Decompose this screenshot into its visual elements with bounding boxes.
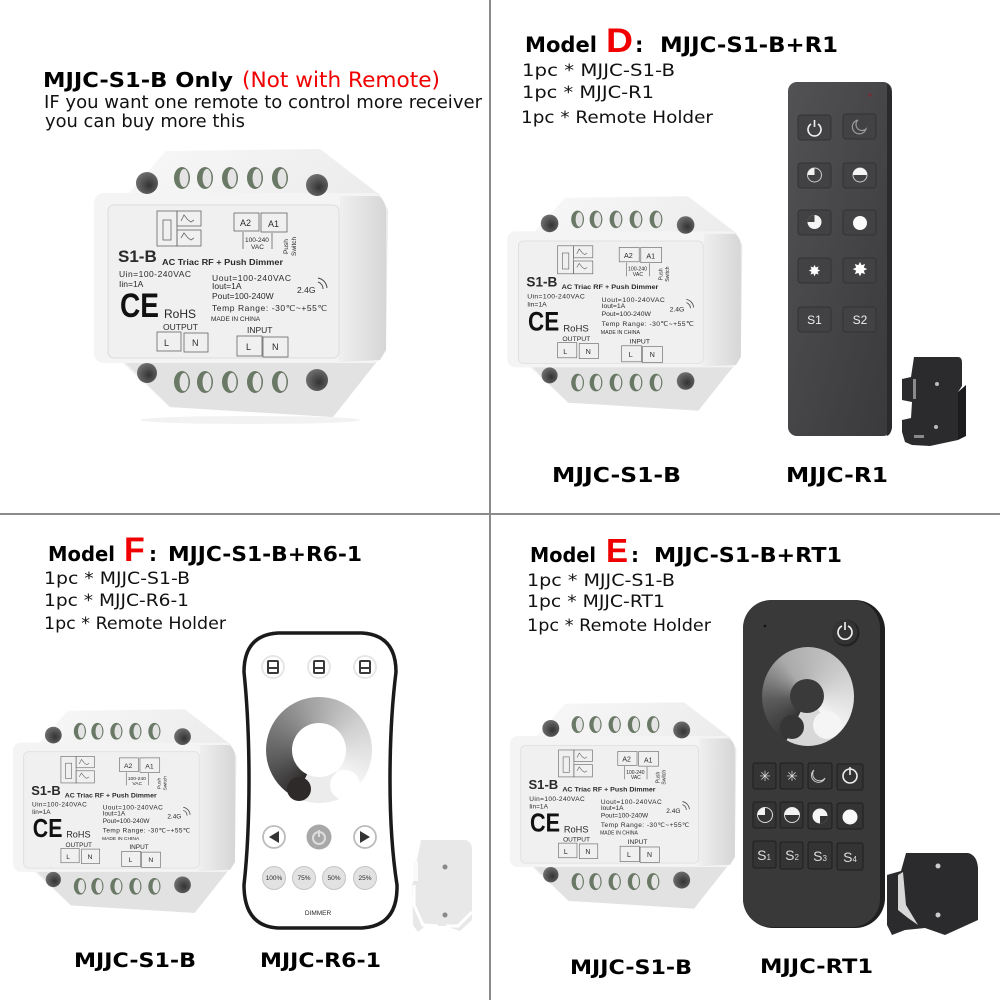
- device: S1-B dimmer large: VAC: [251, 244, 264, 251]
- device: S1-B dimmer: Temp Range: -30℃~+55℃: [103, 827, 190, 834]
- device: S1-B dimmer: Uout=100-240VAC: [602, 297, 665, 304]
- remote: MJJC-RT1: S4: [843, 849, 857, 865]
- device: S1-B dimmer: AC Triac RF + Push Dimmer: [562, 284, 659, 291]
- heading: Model F: [48, 531, 362, 569]
- device: S1-B dimmer: RoHS: [66, 830, 91, 840]
- device: S1-B dimmer: Switch: [163, 776, 169, 791]
- device: S1-B dimmer: S1-B: [526, 275, 558, 290]
- remote: MJJC-R1: [788, 82, 892, 436]
- contents list: 1pc * MJJC-S1-B: [522, 61, 675, 81]
- heading: Model E: MJJC-S1-B+RT1: [654, 543, 842, 567]
- remote: MJJC-RT1: S3: [813, 848, 827, 864]
- heading note: not with remote: (Not with Remote): [242, 68, 440, 92]
- panel: Model F: [13, 531, 472, 972]
- device: S1-B dimmer: AC Triac RF + Push Dimmer: [562, 787, 656, 794]
- panel: Model D: [507, 22, 966, 487]
- contents list: [521, 61, 713, 128]
- device: S1-B dimmer: A2: [622, 757, 631, 764]
- device: S1-B dimmer: N: [650, 350, 655, 359]
- device: S1-B dimmer: Iin=1A: [32, 809, 51, 816]
- device: S1-B dimmer: OUTPUT: [65, 842, 92, 849]
- remote: MJJC-RT1: ✳: [786, 769, 798, 785]
- device: S1-B dimmer large: N: [192, 338, 198, 348]
- device: S1-B dimmer: L: [129, 857, 133, 864]
- device: S1-B dimmer: VAC: [132, 781, 143, 787]
- device: S1-B dimmer large: A1: [268, 219, 279, 229]
- remote: MJJC-RT1: [743, 600, 885, 928]
- device: S1-B dimmer: Uin=100-240VAC: [527, 294, 585, 301]
- remote holder: black: [902, 357, 966, 446]
- device: S1-B dimmer large: CE: [120, 287, 159, 325]
- remote: MJJC-RT1: S1: [757, 847, 771, 863]
- label: MJJC-RT1: MJJC-RT1: [760, 955, 873, 978]
- device: S1-B dimmer large: Uin=100-240VAC: [119, 269, 191, 279]
- device: S1-B dimmer: Iout=1A: [602, 303, 626, 310]
- device: S1-B dimmer large: N: [272, 342, 278, 352]
- device: S1-B dimmer large: 2.4G: [297, 285, 315, 295]
- device: S1-B dimmer: MADE IN CHINA: [600, 831, 639, 837]
- remote: MJJC-R6-1: 50%: [327, 875, 341, 882]
- heading: Model E: Model: [530, 543, 596, 567]
- heading: Model D: [525, 22, 838, 60]
- device: S1-B dimmer: Uin=100-240VAC: [32, 802, 87, 809]
- device: S1-B dimmer large: L: [164, 338, 169, 348]
- device: S1-B dimmer: N: [585, 849, 590, 856]
- device: S1-B dimmer: VAC: [633, 272, 643, 278]
- device: S1-B dimmer: CE: [33, 815, 62, 843]
- device: S1-B dimmer: Temp Range: -30℃~+55℃: [601, 822, 690, 829]
- device: S1-B dimmer: 2.4G: [670, 306, 684, 313]
- device: S1-B dimmer: 2.4G: [167, 814, 181, 821]
- heading: Model E: :: [631, 543, 639, 567]
- device: S1-B dimmer: Pout=100-240W: [602, 311, 651, 318]
- contents list: 1pc * Remote Holder: [527, 616, 711, 635]
- device: S1-B dimmer: Temp Range: -30℃~+55℃: [602, 321, 694, 328]
- device: S1-B dimmer large: S1-B: [118, 247, 157, 266]
- device: S1-B dimmer large: 100-240: [245, 237, 269, 244]
- device: S1-B dimmer: L: [66, 854, 70, 861]
- device: S1-B dimmer: 100-240: [128, 776, 146, 782]
- device: S1-B dimmer: Pout=100-240W: [601, 813, 649, 820]
- device: S1-B dimmer: L: [563, 347, 567, 356]
- device: S1-B dimmer large: Switch: [291, 236, 298, 256]
- device: S1-B dimmer: 100-240: [628, 267, 647, 273]
- device: S1-B dimmer: A1: [646, 252, 655, 261]
- device: S1-B dimmer large: Iin=1A: [119, 279, 144, 289]
- device: S1-B dimmer: Iin=1A: [529, 803, 549, 810]
- remote: MJJC-R6-1: 75%: [297, 875, 311, 882]
- device: S1-B dimmer: [510, 702, 736, 909]
- device: S1-B dimmer: AC Triac RF + Push Dimmer: [65, 792, 157, 799]
- device: S1-B dimmer: RoHS: [564, 824, 589, 834]
- device: S1-B dimmer: CE: [530, 808, 560, 838]
- device: S1-B dimmer large: Temp Range: -30℃~+55℃: [212, 303, 327, 313]
- remote holder: black: [887, 853, 978, 935]
- remote: MJJC-R6-1: 100%: [266, 875, 283, 882]
- device: S1-B dimmer: S1-B: [528, 777, 558, 792]
- device: S1-B dimmer: Uin=100-240VAC: [529, 796, 585, 803]
- remote: MJJC-R6-1: 25%: [358, 875, 372, 882]
- device: S1-B dimmer: L: [627, 852, 631, 859]
- device: S1-B dimmer: N: [647, 852, 652, 859]
- remote holder: white: [412, 840, 472, 932]
- contents list: [527, 571, 711, 635]
- contents list: 1pc * Remote Holder: [521, 108, 713, 128]
- contents list: 1pc * MJJC-R6-1: [44, 591, 189, 610]
- description text: [44, 93, 483, 132]
- remote: MJJC-R1: ✸: [852, 259, 868, 281]
- contents list: 1pc * MJJC-R1: [522, 83, 654, 103]
- remote: MJJC-R6-1: DIMMER: [305, 910, 331, 917]
- heading: Model F: :: [149, 542, 157, 566]
- device: S1-B dimmer: 2.4G: [666, 808, 680, 815]
- remote: MJJC-RT1: S2: [785, 847, 799, 863]
- device: S1-B dimmer: L: [564, 849, 568, 856]
- label: MJJC-R1: MJJC-R1: [786, 463, 888, 487]
- device: S1-B dimmer large: MADE IN CHINA: [211, 316, 261, 323]
- device: S1-B dimmer: MADE IN CHINA: [601, 330, 641, 336]
- remote: MJJC-R6-1: [244, 633, 397, 928]
- device: S1-B dimmer large: AC Triac RF + Push Dimmer: [162, 258, 283, 267]
- device: S1-B dimmer: Switch: [662, 770, 668, 785]
- device: S1-B dimmer: S1-B: [31, 783, 61, 798]
- device: S1-B dimmer: OUTPUT: [563, 837, 590, 844]
- device: S1-B dimmer large: Iout=1A: [212, 281, 242, 291]
- contents list: 1pc * MJJC-S1-B: [527, 571, 675, 590]
- device: S1-B dimmer large: A2: [240, 218, 251, 228]
- device: S1-B dimmer: Push: [655, 771, 661, 783]
- device: S1-B dimmer: N: [148, 857, 153, 864]
- device: S1-B dimmer: MADE IN CHINA: [102, 836, 140, 842]
- device: S1-B dimmer large: Uout=100-240VAC: [212, 273, 291, 283]
- device: S1-B dimmer: OUTPUT: [562, 336, 590, 343]
- device: S1-B dimmer: A1: [145, 764, 154, 771]
- device: S1-B dimmer large: [94, 149, 388, 424]
- remote: MJJC-R1: S2: [853, 313, 868, 327]
- device: S1-B dimmer: A2: [624, 251, 633, 260]
- device: S1-B dimmer large: INPUT: [247, 325, 272, 335]
- device: S1-B dimmer: Uout=100-240VAC: [103, 805, 163, 812]
- heading: Model D: :: [635, 33, 643, 57]
- label: MJJC-S1-B: MJJC-S1-B: [74, 949, 196, 972]
- device: S1-B dimmer: INPUT: [628, 839, 647, 846]
- description text: IF you want one remote to control more receiver: [44, 93, 483, 113]
- device: S1-B dimmer: A1: [644, 757, 653, 764]
- heading: Model D: MJJC-S1-B+R1: [660, 33, 838, 57]
- contents list: 1pc * MJJC-S1-B: [44, 569, 190, 588]
- heading: Model F: MJJC-S1-B+R6-1: [168, 542, 362, 566]
- device: S1-B dimmer: Iout=1A: [601, 805, 624, 812]
- device: S1-B dimmer: INPUT: [630, 338, 650, 345]
- device: S1-B dimmer: [13, 709, 236, 913]
- device: S1-B dimmer: Push: [658, 268, 664, 280]
- panel: Model E: [510, 532, 978, 979]
- contents list: 1pc * MJJC-RT1: [527, 592, 665, 611]
- heading: Model D: Model: [525, 33, 597, 57]
- heading: MJJC-S1-B Only: MJJC-S1-B Only: [43, 68, 233, 92]
- device: S1-B dimmer: Push: [156, 778, 162, 789]
- heading: Model D: D: [606, 22, 633, 60]
- heading: Model F: F: [124, 531, 145, 569]
- device: S1-B dimmer: N: [586, 347, 591, 356]
- contents list: 1pc * Remote Holder: [44, 614, 226, 633]
- device: S1-B dimmer: RoHS: [563, 323, 589, 334]
- device: S1-B dimmer large: Push: [283, 239, 290, 254]
- device: S1-B dimmer: CE: [528, 306, 559, 337]
- device: S1-B dimmer: N: [88, 854, 93, 861]
- label: MJJC-S1-B: MJJC-S1-B: [552, 463, 681, 487]
- panel: MJJC-S1-B only: [43, 68, 483, 424]
- device: S1-B dimmer: Uout=100-240VAC: [601, 799, 662, 806]
- heading: Model F: Model: [48, 542, 115, 566]
- contents list: [44, 569, 226, 633]
- device: S1-B dimmer: VAC: [631, 775, 641, 781]
- device: S1-B dimmer: L: [629, 350, 633, 359]
- device: S1-B dimmer: Iin=1A: [527, 302, 547, 309]
- device: S1-B dimmer: 100-240: [626, 770, 645, 776]
- remote: MJJC-R1: ✸: [808, 262, 821, 280]
- device: S1-B dimmer: Switch: [665, 266, 671, 282]
- heading: Model E: E: [606, 532, 628, 569]
- device: S1-B dimmer large: L: [246, 342, 251, 352]
- label: MJJC-R6-1: MJJC-R6-1: [260, 949, 381, 972]
- device: S1-B dimmer large: RoHS: [164, 307, 196, 321]
- remote: MJJC-R1: S1: [807, 313, 822, 327]
- heading: Model E: [530, 532, 842, 569]
- device: S1-B dimmer large: OUTPUT: [163, 322, 198, 332]
- device: S1-B dimmer: A2: [124, 763, 133, 770]
- device: S1-B dimmer large: Pout=100-240W: [212, 291, 274, 301]
- remote: MJJC-RT1: ✳: [759, 769, 771, 785]
- label: MJJC-S1-B: MJJC-S1-B: [570, 956, 692, 979]
- device: S1-B dimmer: INPUT: [129, 844, 149, 851]
- device: S1-B dimmer: Iout=1A: [103, 811, 126, 818]
- description text: you can buy more this: [45, 112, 245, 132]
- device: S1-B dimmer: Pout=100-240W: [103, 818, 150, 825]
- device: S1-B dimmer: [507, 196, 742, 411]
